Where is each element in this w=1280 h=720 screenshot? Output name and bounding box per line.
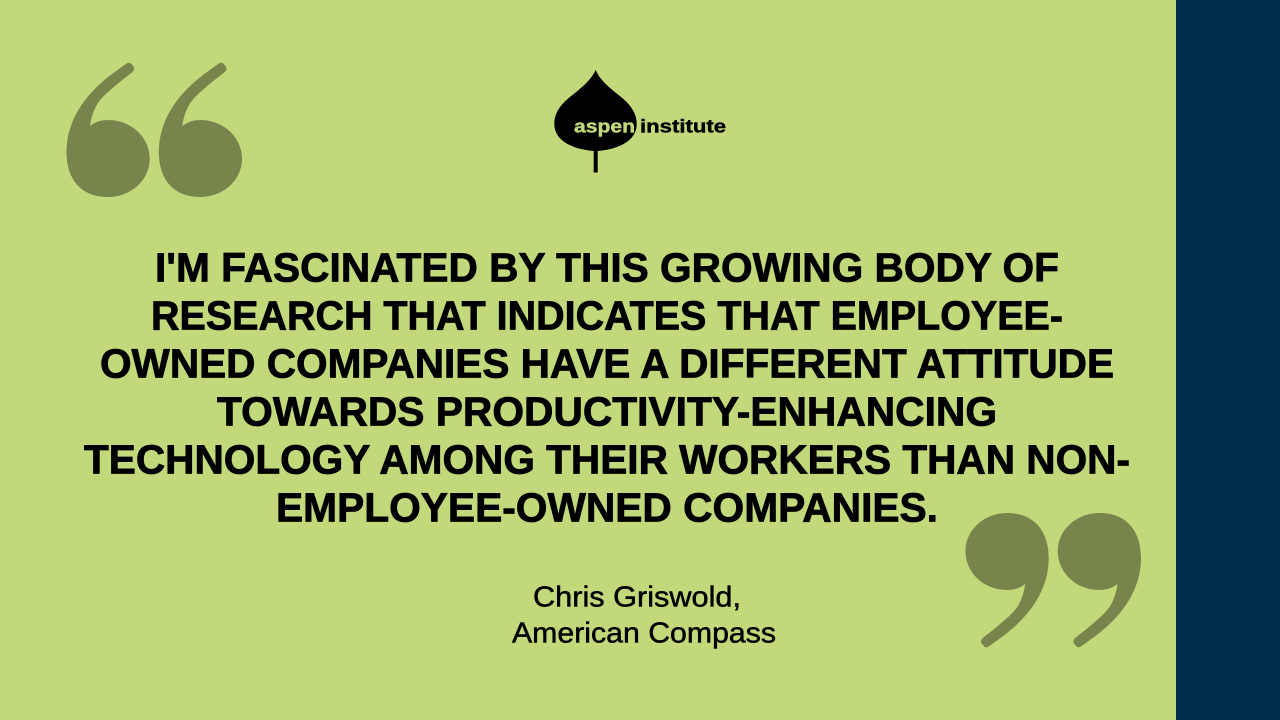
quote text <box>84 244 1130 530</box>
logo: Aspen Institute <box>554 70 726 172</box>
icon: closing quotation marks <box>966 513 1141 647</box>
quote text: TECHNOLOGY AMONG THEIR WORKERS THAN NON- <box>84 436 1130 482</box>
quote text: I'M FASCINATED BY THIS GROWING BODY OF <box>155 244 1059 290</box>
logo wordmark: aspen <box>574 117 635 137</box>
quote text: RESEARCH THAT INDICATES THAT EMPLOYEE- <box>151 292 1063 338</box>
navy side panel <box>1176 0 1280 720</box>
quote text: EMPLOYEE-OWNED COMPANIES. <box>276 484 938 530</box>
attribution: American Compass <box>512 618 776 650</box>
quote text: OWNED COMPANIES HAVE A DIFFERENT ATTITUDE <box>100 340 1114 386</box>
attribution: Chris Griswold, <box>533 582 741 614</box>
quote text: TOWARDS PRODUCTIVITY-ENHANCING <box>217 388 997 434</box>
icon: aspen leaf <box>554 70 637 172</box>
logo wordmark: institute <box>640 117 726 137</box>
icon: opening quotation marks <box>66 63 242 197</box>
attribution <box>512 582 776 650</box>
